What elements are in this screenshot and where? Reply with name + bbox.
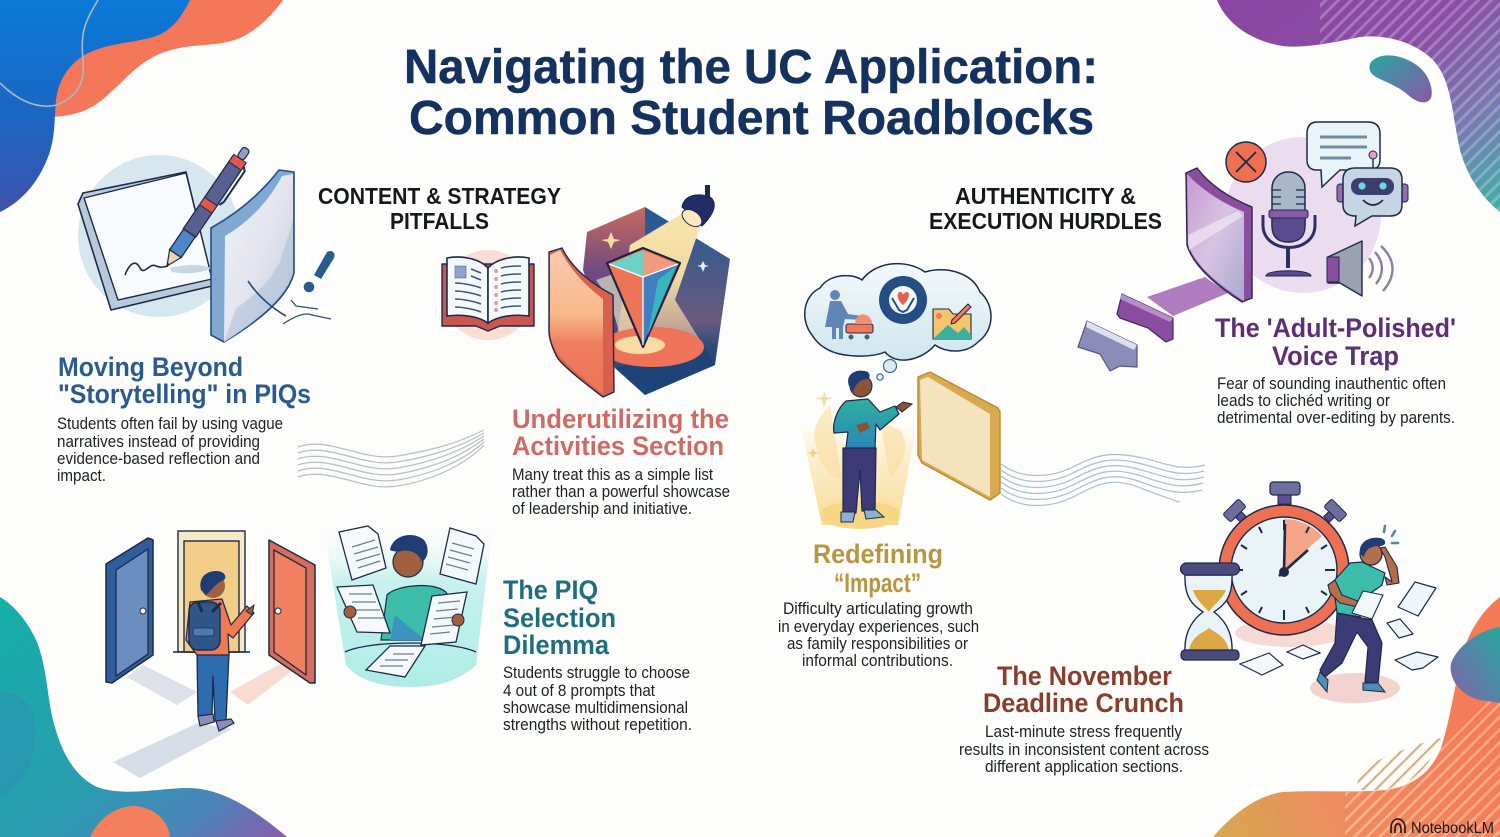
section heading: authenticity and execution hurdles [929, 183, 1162, 234]
text block: moving beyond storytelling: evidence-based reflection and [57, 450, 260, 468]
text block: redefining impact: “Impact” [834, 568, 921, 598]
text block: adult-polished voice trap: Fear of sounding inauthentic often [1217, 375, 1446, 393]
text block: the PIQ selection dilemma: showcase multidimensional [503, 699, 688, 717]
wavy connector: left [298, 430, 484, 487]
text block: adult-polished voice trap: Voice Trap [1272, 341, 1399, 371]
title: Common Student Roadblocks [409, 92, 1094, 145]
title: Navigating the UC Application: [404, 41, 1098, 94]
section heading: authenticity and execution hurdles: EXECUTION HURDLES [929, 208, 1162, 234]
text block: the november deadline crunch: Deadline Crunch [983, 688, 1184, 718]
text block: the november deadline crunch: The November [997, 661, 1172, 691]
illustration: spotlight and gem [549, 185, 730, 397]
text block: redefining impact: as family responsibilities or [787, 635, 968, 653]
text block: the november deadline crunch: Last-minute stress frequently [985, 723, 1183, 741]
illustration: student with prompt papers [323, 522, 493, 687]
illustration: stopwatch, hourglass and stressed student [1180, 482, 1438, 703]
text block: the november deadline crunch: different application sections. [985, 758, 1183, 776]
text block: underutilizing the activities section: Underutilizing the [512, 404, 729, 434]
section heading: content and strategy pitfalls: CONTENT & STRATEGY [318, 183, 561, 209]
text block: redefining impact: Redefining [813, 539, 943, 569]
text block: redefining impact: Difficulty articulating growth [783, 600, 973, 618]
text block: redefining impact: in everyday experiences, such [778, 618, 979, 636]
text block: moving beyond storytelling: Students often fail by using vague [57, 415, 283, 433]
text block: underutilizing the activities section: Many treat this as a simple list [512, 466, 713, 484]
text block: underutilizing the activities section: rather than a powerful showcase [512, 483, 730, 501]
text block: moving beyond storytelling [57, 352, 311, 485]
text block: the PIQ selection dilemma: strengths without repetition. [503, 716, 692, 734]
text block: underutilizing the activities section: of leadership and initiative. [512, 500, 692, 518]
text block: the PIQ selection dilemma [503, 575, 692, 734]
section heading: content and strategy pitfalls: PITFALLS [390, 208, 489, 234]
text block: the PIQ selection dilemma: Students struggle to choose [503, 664, 690, 682]
text block: the PIQ selection dilemma: The PIQ [503, 575, 598, 605]
text block: adult-polished voice trap: The 'Adult-Polished' [1215, 313, 1456, 343]
text block: adult-polished voice trap: leads to clichéd writing or [1217, 392, 1390, 410]
decorative blob: top left [0, 0, 283, 212]
decorative blob: bottom right [1213, 597, 1500, 837]
text block: moving beyond storytelling: narratives instead of providing [57, 433, 260, 451]
text block: adult-polished voice trap [1215, 313, 1456, 427]
illustration: student facing three doors [106, 531, 315, 778]
title [404, 41, 1098, 145]
text block: the PIQ selection dilemma: 4 out of 8 prompts that [503, 682, 655, 700]
decorative blob: bottom left [0, 597, 287, 837]
text block: underutilizing the activities section [512, 404, 730, 518]
decorative blob: top right [1217, 0, 1500, 212]
logo: NotebookLM: NotebookLM [1411, 820, 1494, 837]
section heading: authenticity and execution hurdles: AUTHENTICITY & [955, 183, 1136, 209]
illustration: open book [442, 250, 534, 340]
wavy connector: right [1001, 454, 1205, 506]
text block: redefining impact: informal contributions. [802, 652, 953, 670]
illustration: thinking student with glow and panel [800, 264, 1000, 529]
text block: moving beyond storytelling: "Storytelling" in PIQs [58, 379, 311, 409]
text block: the november deadline crunch: results in inconsistent content across [959, 741, 1209, 759]
text block: the PIQ selection dilemma: Dilemma [503, 630, 610, 660]
text block: underutilizing the activities section: Activities Section [512, 431, 724, 461]
text block: the PIQ selection dilemma: Selection [503, 603, 616, 633]
text block: moving beyond storytelling: Moving Beyond [58, 352, 243, 382]
text block: the november deadline crunch [959, 661, 1209, 776]
text block: adult-polished voice trap: detrimental over-editing by parents. [1217, 409, 1455, 427]
section heading: content and strategy pitfalls [318, 183, 561, 234]
illustration: voice panel, microphone, robot and speaker [1078, 122, 1408, 371]
text block: moving beyond storytelling: impact. [57, 467, 106, 485]
illustration: pen, paper and shield [78, 144, 335, 342]
text block: redefining impact [778, 539, 979, 670]
